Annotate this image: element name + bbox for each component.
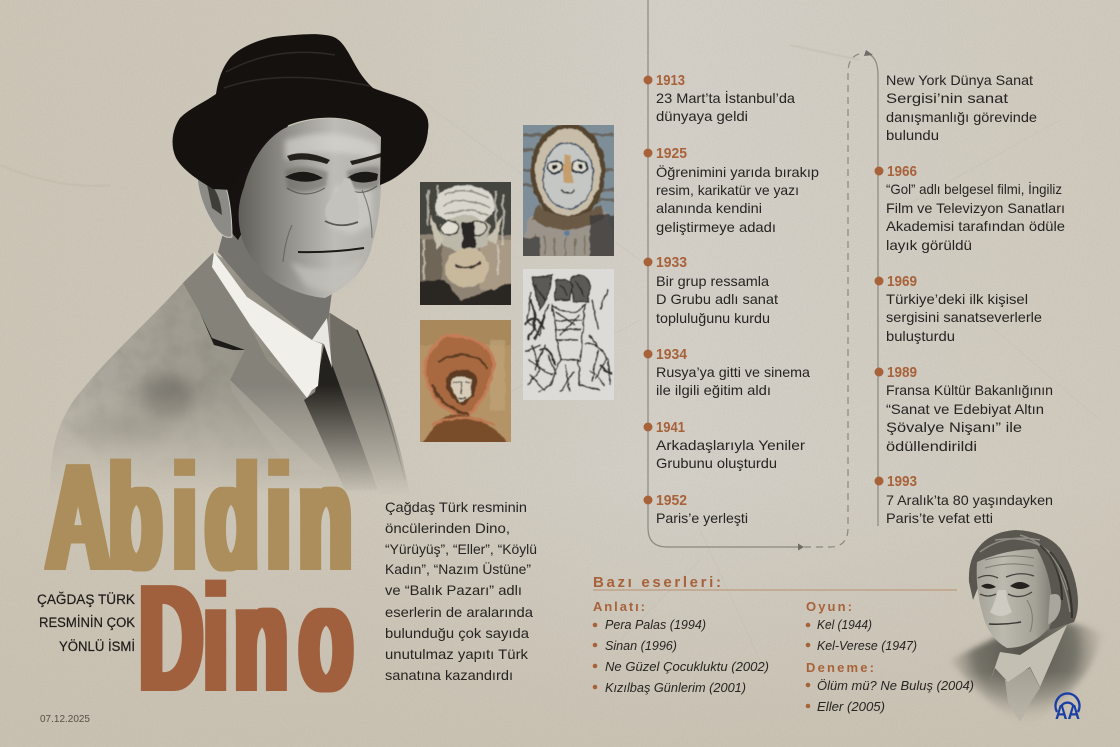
brows [287, 153, 381, 165]
list: Oyun: Kel-Verese (1947) [817, 638, 917, 653]
entry 1993: 1993 [887, 474, 917, 490]
works section [593, 574, 974, 714]
description paragraph: unutulmaz yapıtı Türk [385, 646, 529, 662]
list: Oyun: Kel (1944) [817, 617, 872, 632]
lapel [183, 253, 306, 424]
entry 1925: Öğrenimini yarıda bırakıp [656, 163, 819, 180]
entry 1989 [874, 365, 1053, 454]
jacket [51, 253, 408, 490]
entry continued: New York Dünya Sanat [886, 72, 1033, 88]
entry continued: Sergisi’nin sanat [886, 90, 1008, 106]
entry 1934 [644, 347, 810, 398]
entry 1966: layık görüldü [886, 237, 972, 253]
entry 1925: 1925 [656, 146, 687, 162]
entry 1989: Fransa Kültür Bakanlığının [886, 382, 1053, 398]
entry 1925: alanında kendini [656, 200, 762, 216]
list: Deneme: Ölüm mü? Ne Buluş (2004) [817, 678, 974, 693]
entry 1969: buluşturdu [886, 328, 955, 344]
head backing hair [214, 120, 290, 240]
right lapel [330, 313, 389, 448]
entry 1993: 7 Aralık’ta 80 yaşındayken [886, 492, 1053, 508]
description paragraph: Kadın”, “Nazım Üstüne” [385, 560, 531, 577]
painting: ink drawing [523, 269, 614, 400]
entry continued: bulundu [886, 127, 939, 143]
tie [304, 345, 378, 490]
entry 1989: 1989 [887, 365, 917, 381]
shirt [1005, 668, 1040, 722]
nose [325, 178, 359, 225]
list: Deneme [806, 660, 974, 714]
AA logo [1055, 693, 1080, 724]
entry 1933: D Grubu adlı sanat [656, 291, 778, 307]
title: Abidin: Abidin [46, 433, 352, 602]
entry 1941: Arkadaşlarıyla Yeniler [656, 437, 805, 453]
timeline line with arrows [648, 0, 878, 550]
entry 1969: Türkiye’deki ilk kişisel [886, 291, 1028, 307]
elderly portrait [950, 530, 1102, 730]
painting: grey face [420, 182, 511, 305]
description paragraph: sanatına kazandırdı [385, 667, 513, 683]
entry 1993 [874, 474, 1053, 526]
eyes [981, 582, 1030, 589]
description paragraph: “Yürüyüş”, “Eller”, “Köylü [385, 541, 537, 557]
entry continued: danışmanlığı görevinde [886, 109, 1037, 125]
entry 1989: ödüllendirildi [886, 438, 977, 454]
entry 1952: Paris’e yerleşti [656, 510, 748, 526]
description paragraph: bulunduğu çok sayıda [385, 625, 529, 641]
entry 1934: 1934 [656, 347, 687, 363]
hat [173, 34, 428, 190]
list: Anlatı [593, 599, 769, 695]
subtitle: ÇAĞDAŞ TÜRK [37, 592, 135, 607]
entry 1913: dünyaya geldi [656, 108, 748, 124]
entry 1933: topluluğunu kurdu [656, 310, 770, 326]
entry 1933: 1933 [656, 255, 687, 271]
eyes [285, 172, 378, 183]
works heading: Bazı eserleri: [593, 574, 721, 591]
entry 1952 [644, 493, 748, 526]
subtitle: YÖNLÜ İSMİ [59, 639, 135, 654]
entry 1966 [874, 164, 1065, 253]
paintings gallery [415, 125, 620, 447]
entry 1934: ile ilgili eğitim aldı [656, 382, 771, 398]
entry 1941 [644, 420, 805, 471]
subtitle: RESMİNİN ÇOK [39, 615, 135, 630]
hair [969, 530, 1078, 630]
list: Anlatı: Kızılbaş Günlerim (2001) [605, 680, 746, 695]
ear [197, 165, 232, 237]
mouth [298, 248, 364, 252]
entry 1913 [644, 73, 795, 124]
entry 1952: 1952 [656, 493, 687, 509]
entry 1993: Paris’te vefat etti [886, 510, 993, 526]
subtitle [37, 592, 135, 654]
list: Anlatı: Pera Palas (1994) [605, 617, 706, 632]
list: Deneme: Deneme: [806, 660, 874, 675]
entry 1966: “Gol” adlı belgesel filmi, İngiliz [886, 180, 1062, 197]
main portrait with hat [40, 34, 428, 510]
face [239, 118, 381, 298]
description paragraph: Çağdaş Türk resminin [385, 499, 527, 515]
entry 1934: Rusya’ya gitti ve sinema [656, 364, 810, 380]
entry 1933: Bir grup ressamla [656, 273, 769, 289]
entry 1966: Film ve Televizyon Sanatları [886, 200, 1065, 216]
list: Anlatı: Ne Güzel Çocukluktu (2002) [605, 659, 769, 674]
list: Oyun [806, 599, 917, 653]
entry 1969 [874, 274, 1042, 344]
description paragraph [385, 499, 537, 683]
nose and mouth [990, 590, 1012, 616]
list: Anlatı: Anlatı: [593, 599, 645, 614]
timeline: left column [644, 73, 819, 526]
list: Oyun: Oyun: [806, 599, 852, 614]
entry 1941: Grubunu oluşturdu [656, 455, 777, 471]
date: 07.12.2025 [40, 714, 90, 725]
painting: orange-brown portrait [420, 320, 511, 442]
timeline: right column [874, 72, 1065, 526]
jacket [952, 621, 1100, 714]
entry 1989: “Sanat ve Edebiyat Altın [886, 401, 1044, 417]
entry 1969: sergisini sanatseverlerle [886, 309, 1042, 325]
entry 1966: Akademisi tarafından ödüle [886, 218, 1065, 234]
entry 1925 [644, 146, 819, 235]
entry 1913: 23 Mart’ta İstanbul’da [656, 89, 795, 106]
entry 1966: 1966 [887, 164, 917, 180]
title: Dino: Dino [139, 554, 353, 723]
entry continued [886, 72, 1037, 143]
description paragraph: eserlerin de aralarında [385, 604, 533, 620]
description paragraph: öncülerinden Dino, [385, 520, 510, 536]
entry 1925: geliştirmeye adadı [656, 219, 776, 235]
entry 1989: Şövalye Nişanı” ile [886, 419, 1022, 435]
entry 1969: 1969 [887, 274, 917, 290]
description paragraph: ve “Balık Pazarı” adlı [385, 582, 522, 598]
entry 1925: resim, karikatür ve yazı [656, 182, 799, 198]
entry 1933 [644, 255, 778, 326]
face [977, 549, 1053, 648]
neck [218, 215, 332, 340]
collar [990, 625, 1067, 687]
AA logo: AA [1055, 702, 1080, 724]
painting: round helmet figure [523, 125, 614, 256]
list: Deneme: Eller (2005) [817, 699, 885, 714]
entry 1913: 1913 [656, 73, 685, 89]
list: Anlatı: Sinan (1996) [605, 638, 677, 653]
shirt collar [212, 252, 322, 398]
entry 1941: 1941 [656, 420, 685, 436]
